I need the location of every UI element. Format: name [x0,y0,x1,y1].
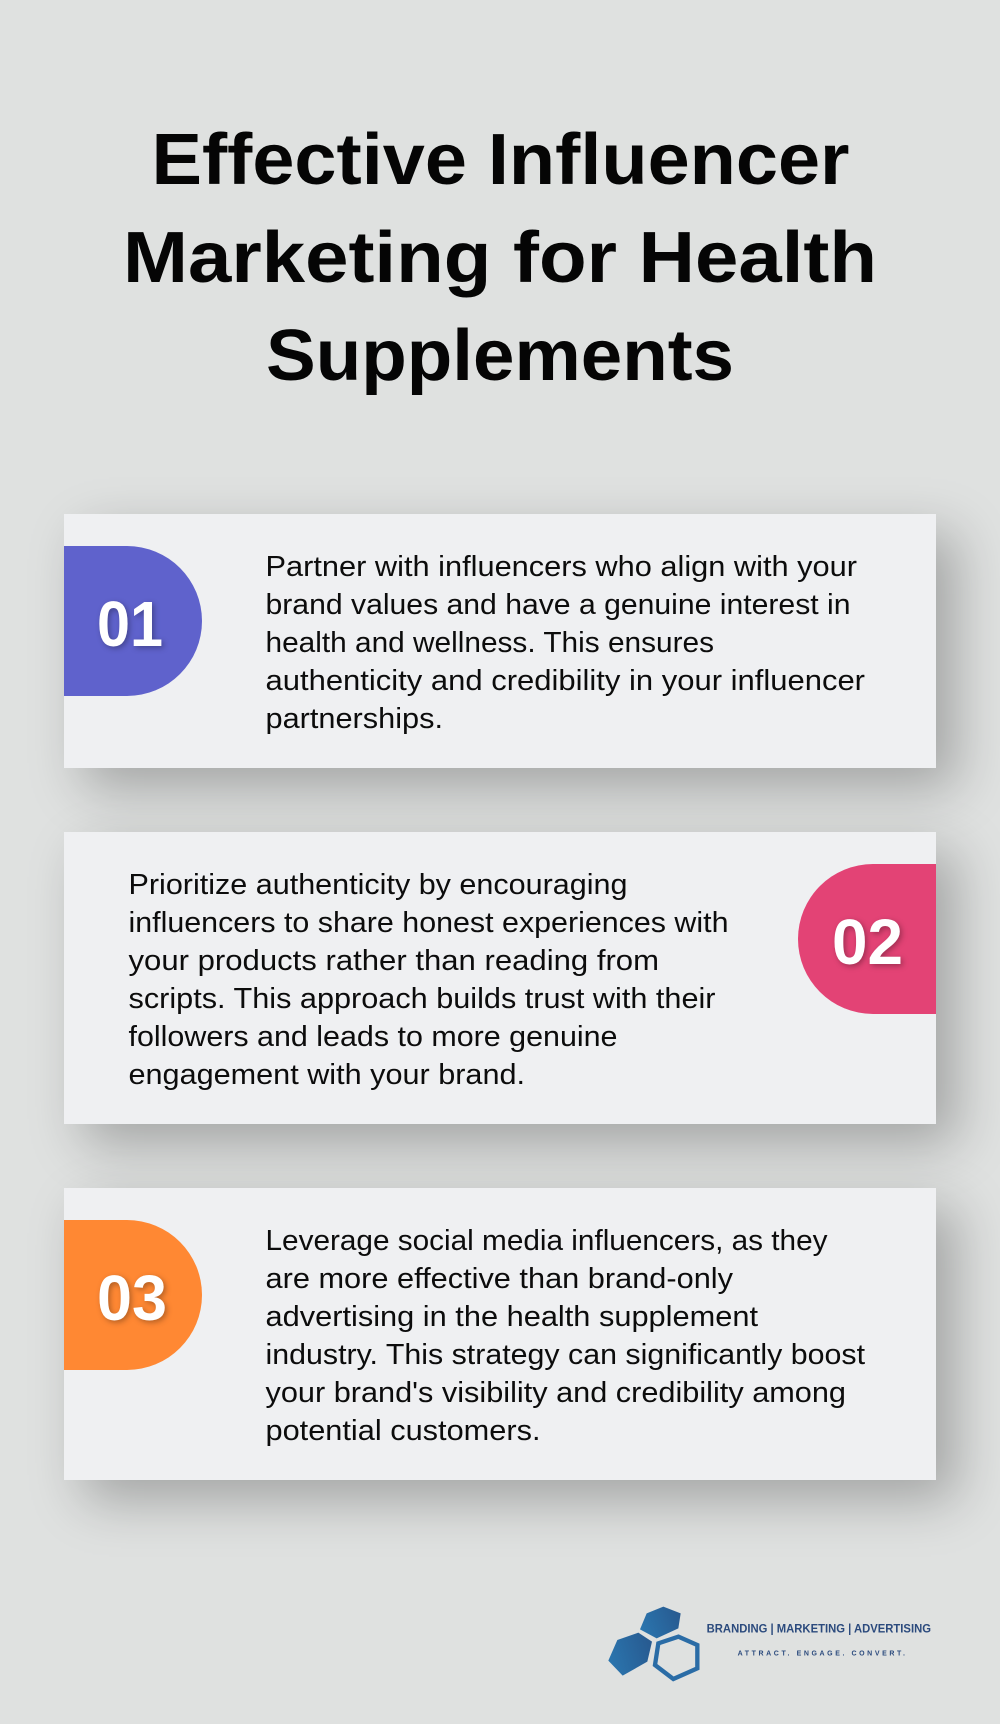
panel: step 02 [64,832,936,1124]
text block: step 02: your products rather than reading from [128,945,659,977]
text block: step 03 [266,1225,865,1447]
title [123,120,877,396]
badge: 01 [64,546,202,696]
icon: top hexagon [640,1607,681,1638]
text block: step 03: potential customers. [266,1415,540,1447]
badge: 02: 02 [832,906,903,978]
text block: step 01 [266,551,866,735]
text block: step 01: Partner with influencers who align with your [266,551,858,583]
text block: step 01: authenticity and credibility in your influencer [266,665,866,697]
icon: left hexagon [608,1633,652,1676]
text block: step 02: followers and leads to more genuine [128,1021,618,1053]
text block: step 02: engagement with your brand. [128,1059,525,1091]
title: Marketing for Health [123,218,877,298]
title: Effective Influencer [152,120,850,200]
text block: step 03: advertising in the health supplement [266,1301,758,1333]
text block: step 03: industry. This strategy can significantly boost [266,1339,865,1371]
title: Supplements [266,316,734,396]
badge: 03: 03 [97,1262,167,1334]
text block: step 03: Leverage social media influencers, as they [266,1225,828,1257]
text block: step 01: partnerships. [266,703,443,735]
logo [608,1606,931,1682]
text block: step 02: scripts. This approach builds trust with their [128,983,716,1015]
badge: 03 [64,1220,202,1370]
text block: step 02 [128,869,728,1091]
panel: step 01 [64,514,936,768]
text block: step 03: are more effective than brand-only [266,1263,734,1295]
text block: step 02: Prioritize authenticity by encouraging [128,869,628,901]
icon: outlined hexagon [655,1637,697,1679]
text block: step 01: brand values and have a genuine interest in [266,589,850,621]
brand line: BRANDING | MARKETING | ADVERTISING [707,1623,931,1636]
panel: step 03 [64,1188,936,1480]
text block: step 01: health and wellness. This ensures [266,627,714,659]
badge: 02 [798,864,936,1014]
text block: step 02: influencers to share honest experiences with [128,907,728,939]
tagline: ATTRACT. ENGAGE. CONVERT. [738,1650,905,1657]
badge: 01: 01 [97,588,163,660]
text block: step 03: your brand's visibility and credibility among [266,1377,846,1409]
